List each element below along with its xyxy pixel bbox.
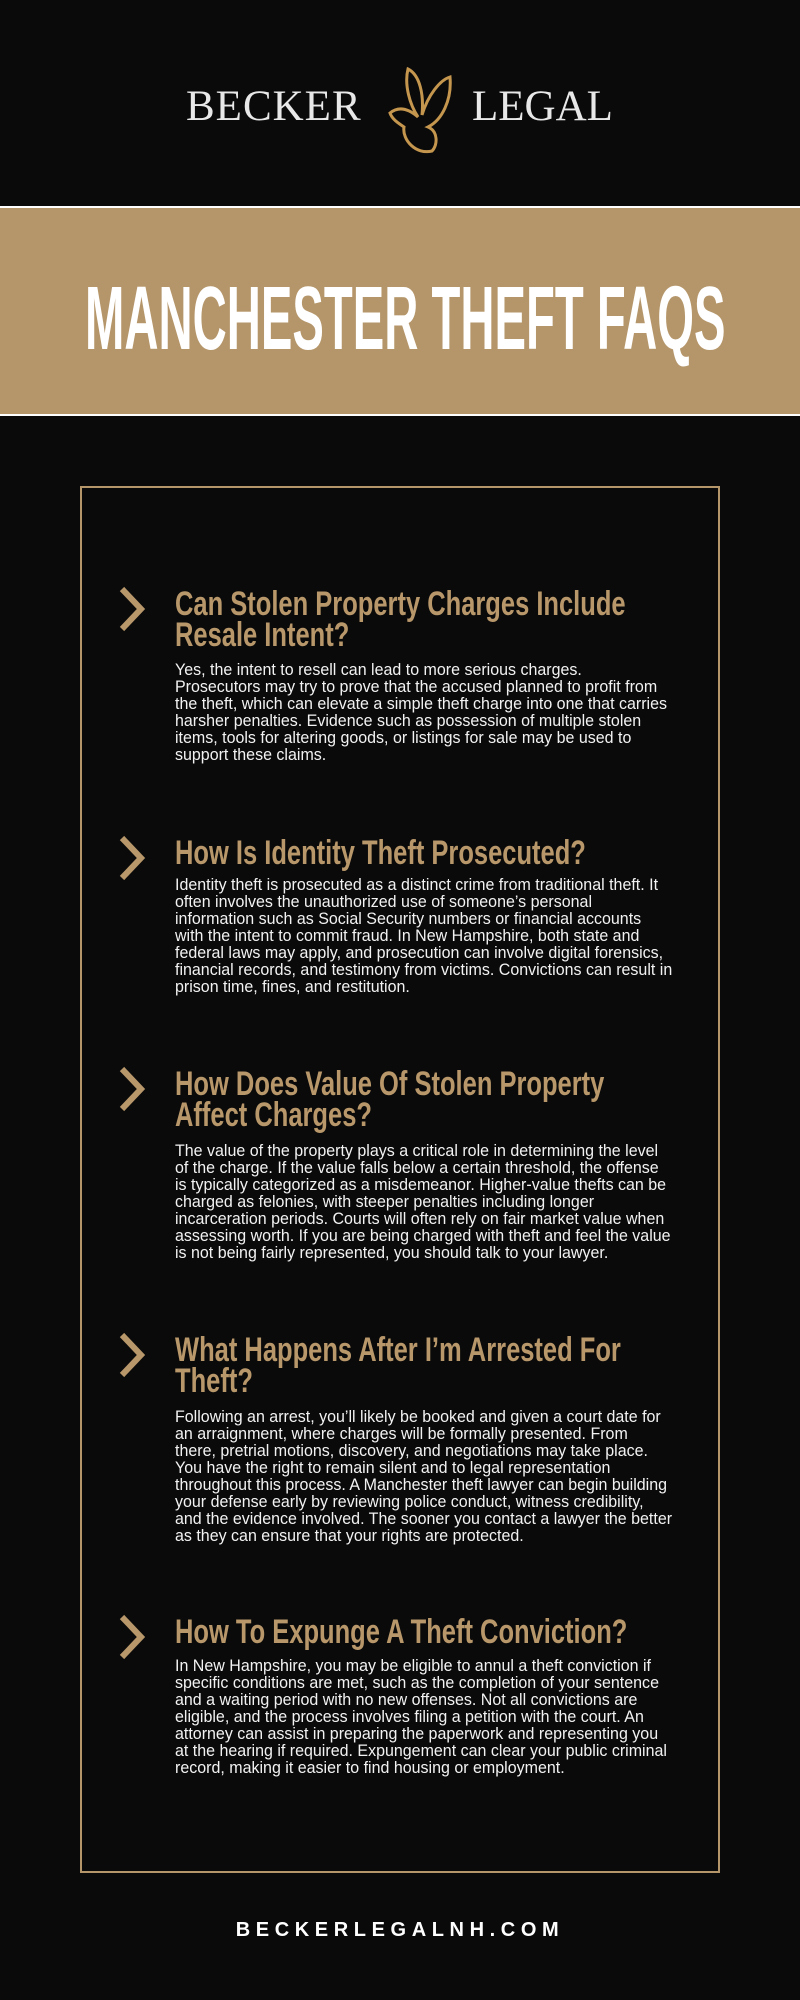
footer url: BECKERLEGALNH.COM — [236, 1919, 564, 1941]
text 3 — [175, 1142, 671, 1262]
text 1: Yes, the intent to resell can lead to more serious charges. — [175, 661, 582, 679]
text 1: support these claims. — [175, 746, 326, 764]
icon: chevron 1 — [120, 586, 145, 632]
text 5: record, making it easier to find housing or employment. — [175, 1759, 565, 1777]
text 2: prison time, fines, and restitution. — [175, 978, 410, 996]
text 2: with the intent to commit fraud. In New Hampshire, both state and — [175, 927, 639, 945]
heading 2: How Is Identity Theft Prosecuted? — [175, 834, 586, 872]
logo — [186, 66, 613, 154]
text 5 — [175, 1657, 667, 1777]
icon: chevron 3 — [120, 1066, 145, 1112]
text 2: Identity theft is prosecuted as a distinct crime from traditional theft. It — [175, 876, 658, 894]
heading 3: Affect Charges? — [175, 1096, 372, 1134]
panel: FAQ box — [80, 486, 720, 1873]
logo text: BECKER: BECKER — [186, 83, 362, 130]
text 2: federal laws may apply, and prosecution can involve digital forensics, — [175, 944, 663, 962]
heading 3: How Does Value Of Stolen Property — [175, 1065, 604, 1103]
heading 5: How To Expunge A Theft Conviction? — [175, 1613, 627, 1651]
text 5: at the hearing if required. Expungement can clear your public criminal — [175, 1742, 667, 1760]
text 4 — [175, 1408, 672, 1545]
logo text: LEGAL: LEGAL — [472, 83, 613, 130]
text 1 — [175, 661, 667, 764]
heading 1 — [175, 585, 626, 654]
text 1: the theft, which can elevate a simple theft charge into one that carries — [175, 695, 667, 713]
text 1: Prosecutors may try to prove that the accused planned to profit from — [175, 678, 657, 696]
text 1: harsher penalties. Evidence such as possession of multiple stolen — [175, 712, 641, 730]
text 4: as they can ensure that your rights are protected. — [175, 1527, 524, 1545]
text 5: In New Hampshire, you may be eligible to annul a theft conviction if — [175, 1657, 651, 1675]
text 4: throughout this process. A Manchester theft lawyer can begin building — [175, 1476, 667, 1494]
text 3: The value of the property plays a critical role in determining the level — [175, 1142, 658, 1160]
text 3: incarceration periods. Courts will often rely on fair market value when — [175, 1210, 664, 1228]
text 4: and the evidence involved. The sooner you contact a lawyer the better — [175, 1510, 672, 1528]
text 3: charged as felonies, with steeper penalties including longer — [175, 1193, 594, 1211]
text 3: is typically categorized as a misdemeanor. Higher-value thefts can be — [175, 1176, 666, 1194]
icon: chevron 5 — [120, 1614, 145, 1660]
heading 1: Can Stolen Property Charges Include — [175, 585, 626, 623]
heading 4: Theft? — [175, 1362, 253, 1400]
text 5: eligible, and the process involves filing a petition with the court. An — [175, 1708, 644, 1726]
text 4: You have the right to remain silent and to legal representation — [175, 1459, 610, 1477]
text 3: of the charge. If the value falls below a certain threshold, the offense — [175, 1159, 659, 1177]
text 4: an arraignment, where charges will be formally presented. From — [175, 1425, 628, 1443]
text 3: assessing worth. If you are being charged with theft and feel the value — [175, 1227, 671, 1245]
text 3: is not being fairly represented, you should talk to your lawyer. — [175, 1244, 608, 1262]
text 5: specific conditions are met, such as the completion of your sentence — [175, 1674, 659, 1692]
text 2 — [175, 876, 672, 996]
icon: gold bird — [388, 66, 452, 154]
text 4: Following an arrest, you’ll likely be booked and given a court date for — [175, 1408, 661, 1426]
text 2: information such as Social Security numbers or financial accounts — [175, 910, 641, 928]
text 2: financial records, and testimony from victims. Convictions can result in — [175, 961, 672, 979]
heading 4: What Happens After I’m Arrested For — [175, 1331, 621, 1369]
heading 4 — [175, 1331, 621, 1400]
text 4: your defense early by reviewing police conduct, witness credibility, — [175, 1493, 644, 1511]
text 5: attorney can assist in preparing the paperwork and representing you — [175, 1725, 658, 1743]
heading 1: Resale Intent? — [175, 616, 349, 654]
text 5: and a waiting period with no new offenses. Not all convictions are — [175, 1691, 637, 1709]
text 2: often involves the unauthorized use of someone’s personal — [175, 893, 592, 911]
icon: chevron 4 — [120, 1332, 145, 1378]
text 1: items, tools for altering goods, or listings for sale may be used to — [175, 729, 631, 747]
text 4: there, pretrial motions, discovery, and negotiations may take place. — [175, 1442, 648, 1460]
heading 3 — [175, 1065, 604, 1134]
icon: chevron 2 — [120, 836, 145, 880]
title: MANCHESTER THEFT FAQS — [85, 269, 726, 369]
title banner — [0, 206, 800, 416]
